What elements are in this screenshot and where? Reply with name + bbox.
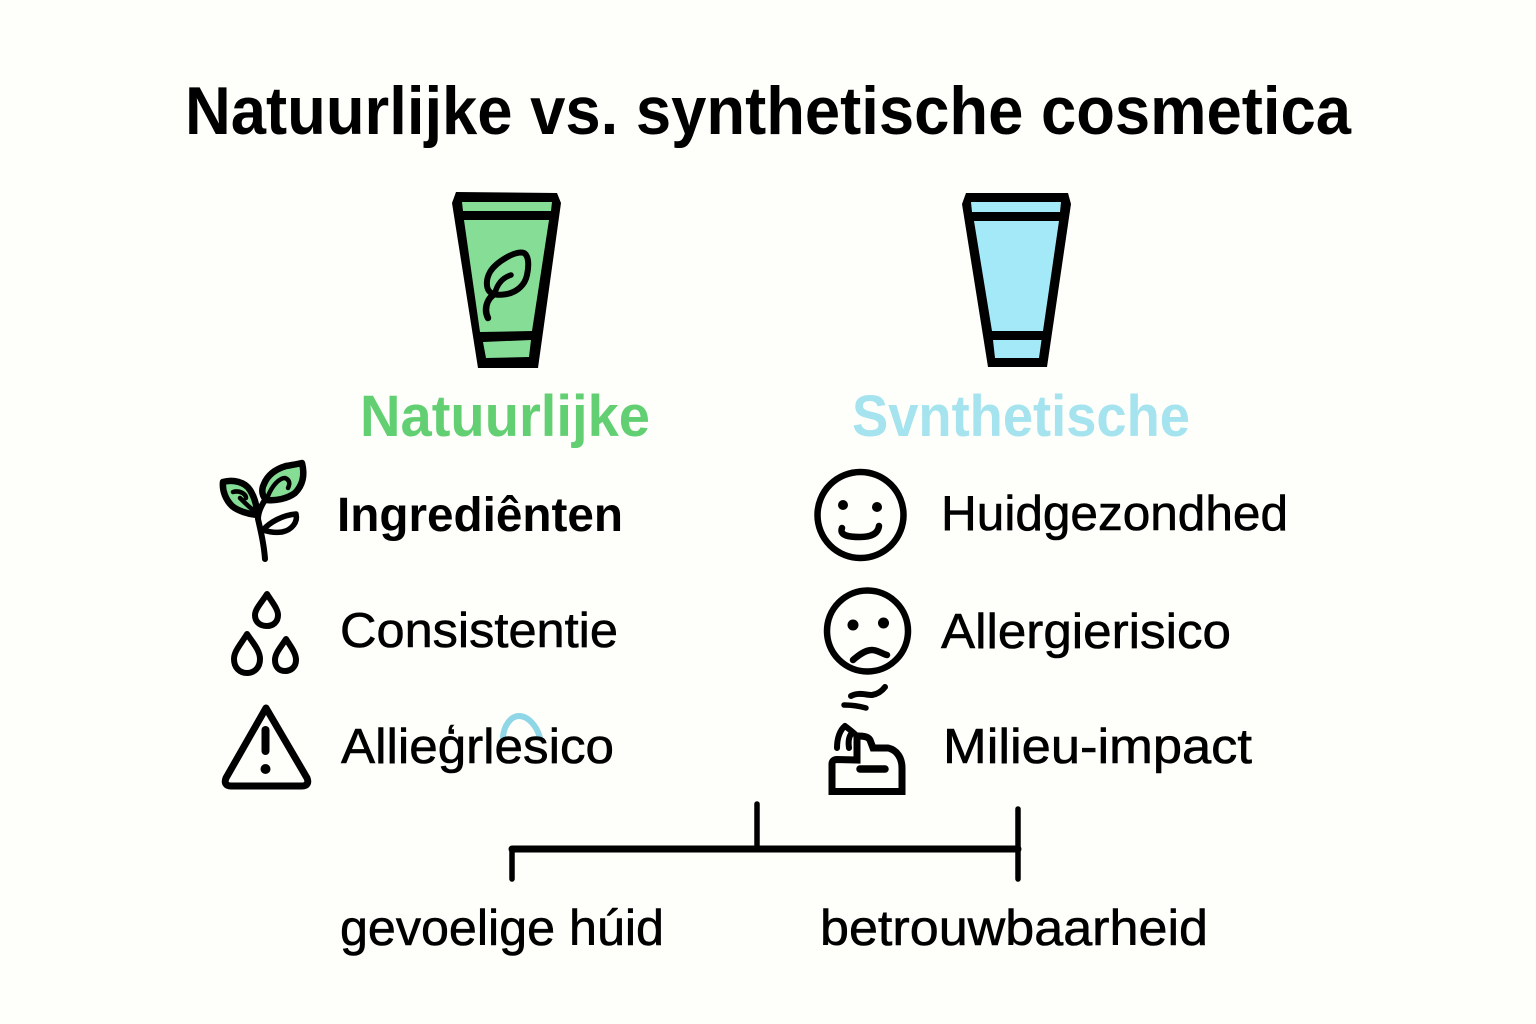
label: Allergierisico: Allergierisico xyxy=(941,605,1231,659)
label: Milieu-impact: Milieu-impact xyxy=(943,720,1252,774)
label: gevoelige huid: gevoelige húid xyxy=(340,900,664,956)
label: Ingrediënten: Ingrediênten xyxy=(337,489,623,542)
icon: warning triangle xyxy=(225,708,308,786)
label: betrouwbaarheid: betrouwbaarheid xyxy=(820,900,1208,956)
icon: green natural tube with leaf xyxy=(452,192,561,368)
label: Consistentie: Consistentie xyxy=(340,604,618,658)
icon: blue synthetic tube xyxy=(962,193,1071,367)
decorative blue arc behind label xyxy=(503,716,540,739)
icon: plant sprout xyxy=(223,463,303,559)
icon: three drops xyxy=(234,594,296,673)
icon: factory hand box xyxy=(832,726,902,792)
icon: smiling face xyxy=(818,472,904,558)
heading: Natuurlijke: Natuurlijke xyxy=(360,384,650,449)
icon: smoke squiggles xyxy=(844,687,885,708)
icon: sad face xyxy=(827,590,908,672)
label: Huidgezondhed: Huidgezondhed xyxy=(941,487,1288,541)
bracket connector xyxy=(512,804,1018,879)
label: Allergierisico garbled: Allieģrlesico xyxy=(341,720,614,774)
title: Natuurlijke vs. synthetische cosmetica xyxy=(185,73,1352,149)
heading: Synthetische: Svnthetische xyxy=(852,384,1190,449)
